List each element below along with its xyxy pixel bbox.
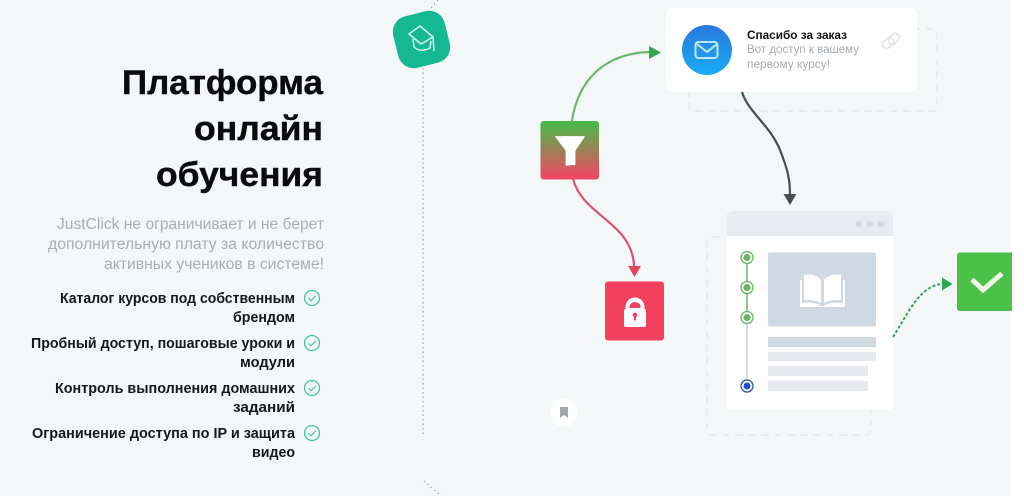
card heading: Спасибо за заказ [747, 28, 847, 42]
icon: lock [605, 282, 664, 340]
arrow: red to lock [573, 179, 641, 277]
description text: активных учеников в системе! [104, 256, 324, 273]
arrow: green to message card [572, 46, 661, 121]
title: обучения [156, 156, 323, 194]
card text: первому курсу! [747, 59, 830, 71]
card text: Вот доступ к вашему [747, 44, 859, 56]
window title bar [726, 211, 893, 236]
icon: funnel [540, 121, 599, 180]
feature 4: Ограничение доступа по IP и защита [32, 426, 296, 442]
icon: mail [682, 25, 732, 75]
message card [666, 8, 917, 92]
description text [48, 216, 324, 273]
feature 4: видео [252, 445, 295, 461]
dashed outline behind message card [689, 29, 937, 111]
dotted timeline [423, 0, 441, 496]
dashed outline behind course window [707, 237, 871, 435]
image placeholder with book icon [768, 252, 876, 326]
feature list [31, 290, 320, 461]
feature 2 [31, 336, 320, 371]
text lines [768, 337, 876, 391]
title: Платформа [122, 64, 324, 102]
feature 1 [60, 290, 320, 326]
progress steps [741, 252, 753, 392]
feature 1: Каталог курсов под собственным [60, 291, 295, 307]
feature 2: модули [240, 355, 295, 371]
arrow: dotted green to check [893, 278, 952, 337]
description text: JustClick не ограничивает и не берет [57, 216, 324, 233]
arrow: dark to course window [742, 92, 796, 205]
course window [726, 211, 893, 410]
feature 2: Пробный доступ, пошаговые уроки и [31, 336, 295, 352]
feature 3: заданий [233, 400, 295, 416]
feature 1: брендом [233, 310, 295, 326]
title: онлайн [194, 110, 323, 148]
description text: дополнительную плату за количество [48, 236, 324, 253]
icon: check [957, 252, 1012, 311]
icon: bookmark [550, 398, 578, 426]
feature 4 [32, 426, 320, 461]
feature 3: Контроль выполнения домашних [55, 381, 295, 397]
icon: graduation cap badge [389, 7, 454, 72]
feature 3 [55, 380, 320, 416]
title [122, 64, 324, 194]
icon: paperclip [881, 32, 901, 50]
card text [747, 44, 859, 71]
